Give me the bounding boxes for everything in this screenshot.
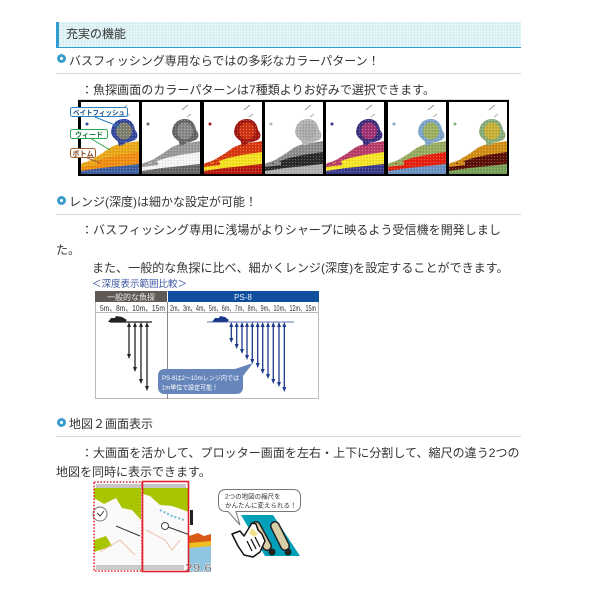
label: weed: ウィード [75,130,103,139]
callout: 1m単位で設定可能！ [162,382,218,392]
heading 1 marker icon [57,54,66,63]
body text 3: 地図を同時に表示できます。 [56,465,211,479]
dotted red frame [94,482,142,571]
callout [158,363,253,394]
range values: 5m、8m、10m、15m [100,303,165,313]
label: bottom: ボトム [72,149,94,158]
panel 4 [265,102,323,174]
panel 7 [449,102,507,174]
panel 6 [388,102,446,174]
right map land [143,488,189,512]
button illustration with speech bubble [218,489,301,558]
footer bar [96,565,184,570]
heading 3: 地図２画面表示 [69,417,153,431]
heading 2: レンジ(深度)は細かな設定が可能！ [69,195,257,209]
panel 5 [326,102,384,174]
map header bar [96,484,186,488]
body text 2: た。 [56,243,80,257]
depth range comparison chart [92,278,319,399]
general fish finder header: 一般的な魚探 [107,292,155,302]
label: bait fish [70,108,128,127]
PS-8 header: PS-8 [234,293,252,302]
callout: PS-8は2～10mレンジ内では [162,373,239,382]
color pattern strip [70,99,509,176]
speech bubble [218,490,300,525]
label: bottom [70,148,100,163]
panel 2 [142,102,200,174]
body text 2 [56,223,509,275]
heading 1: バスフィッシング専用ならではの多彩なカラーパターン！ [69,54,380,68]
heading 2 marker icon [57,196,66,205]
body text 3 [56,446,520,479]
left map land [94,488,141,552]
body text 1: ：魚探画面のカラーパターンは7種類よりお好みで選択できます。 [81,83,435,97]
body text 2: また、一般的な魚探に比べ、細かくレンジ(深度)を設定することができます。 [92,261,509,275]
hand pointer icon [232,523,265,557]
speech bubble: 2つの地図の縮尺を [225,492,281,500]
sonar strip [189,481,211,572]
left button [256,526,276,556]
panel 1 [81,102,139,174]
general fish finder header [95,291,167,302]
section title bar: 充実の機能 [66,27,126,41]
depth value: 29.6 [185,561,212,575]
chart caption: ＜深度表示範囲比較＞ [92,278,187,290]
general finder sounding diagram [108,316,152,391]
label: weed [70,130,110,150]
panel 3 [204,102,262,174]
label: bait fish: ベイトフィッシュ [73,109,125,117]
right button [275,526,292,556]
range values [95,302,319,399]
teal button panel [241,515,300,556]
body text 2: ：バスフィッシング専用に浅場がよりシャープに映るよう受信機を開発しまし [81,223,501,237]
section title bar [56,22,521,48]
map details [93,507,190,555]
body text 3: ：大画面を活かして、プロッター画面を左右・上下に分割して、縮尺の違う2つの [81,446,520,460]
speech bubble: かんたんに変えられる！ [225,500,296,510]
PS-8 sounding diagram [207,316,294,392]
solid red frame [142,482,188,572]
heading 3 marker icon [57,418,66,427]
PS-8 header [168,291,319,302]
dual map screen image [92,480,212,575]
